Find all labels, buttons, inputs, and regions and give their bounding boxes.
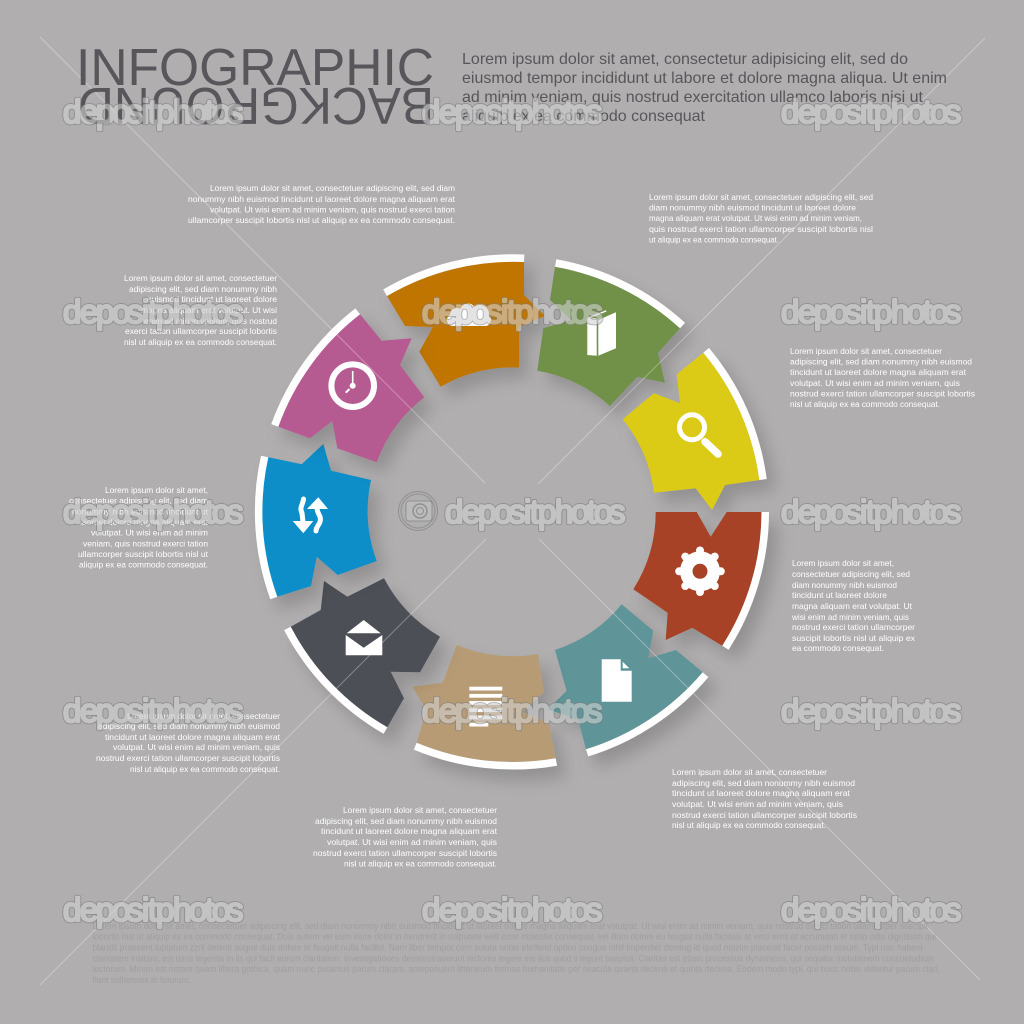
- watermarks: depositphotos: [422, 692, 602, 729]
- faint footer paragraph: blandit praesent luptatum zzril delenit augue duis dolore te feugait nulla facilisi. Nam liber tempor cum soluta nobis eleifend option congue nihil imperdiet doming id quod mazim placerat facer possim assum. Typi non habent: [92, 942, 923, 952]
- segment: teal document: [548, 604, 708, 756]
- caption: bottom right: nostrud exerci tation ullamcorper suscipit lobortis: [672, 810, 858, 820]
- watermarks: depositphotos: [422, 891, 602, 928]
- watermarks: depositphotos: [422, 93, 602, 130]
- watermarks: depositphotos: [63, 293, 244, 330]
- icon: clock: [331, 364, 374, 407]
- caption: bottom centre: nisl ut aliquip ex ea commodo consequat.: [344, 858, 497, 868]
- watermarks: depositphotos: [445, 493, 626, 530]
- caption: top right: magna aliquam erat volutpat. Ut wisi enim ad minim veniam,: [649, 213, 862, 223]
- caption: right upper: nisl ut aliquip ex ea commodo consequat.: [790, 399, 940, 409]
- caption: left: [69, 485, 209, 570]
- watermarks: depositphotos: [63, 93, 244, 130]
- caption: upper left: enim ad minim veniam, quis nostrud: [144, 316, 277, 326]
- caption: top left: ullamcorper suscipit lobortis nisl ut aliquip ex ea commodo consequat.: [188, 215, 455, 225]
- caption: bottom centre: nostrud exerci tation ullamcorper suscipit lobortis: [313, 848, 498, 858]
- segment: tan list: [412, 645, 557, 770]
- caption: right lower: wisi enim ad minim veniam, quis: [791, 612, 910, 622]
- caption: right lower: nostrud exerci tation ullamcorper: [792, 622, 915, 632]
- watermarks: depositphotos: [63, 493, 244, 530]
- faint footer paragraph: lobortis nisl ut aliquip ex ea commodo consequat. Duis autem vel eum iriure dolor in hendrerit in vulputate velit esse molestie consequat, vel illum dolore eu feugiat nulla facilisis at vero eros et accumsan et iusto odio dignissim qui: [92, 932, 936, 942]
- caption: bottom right: tincidunt ut laoreet dolore magna aliquam erat: [672, 788, 851, 798]
- segment: orange cloud: [383, 254, 545, 387]
- segment: red gear: [633, 512, 769, 650]
- icon: magnifier: [680, 415, 718, 454]
- intro paragraph: eiusmod tempor incididunt ut labore et dolore magna aliqua. Ut enim: [462, 70, 947, 87]
- watermarks: depositphotos: [781, 493, 962, 530]
- caption: right lower: suscipit lobortis nisl ut aliquip ex: [792, 633, 916, 643]
- intro paragraph: ad minim veniam, quis nostrud exercitation ullamco laboris nisi ut: [462, 89, 924, 106]
- caption: upper left: exerci tation ullamcorper suscipit lobortis: [125, 326, 278, 336]
- caption: right lower: diam nonummy nibh euismod: [792, 580, 897, 590]
- watermark camera icon: [398, 492, 438, 530]
- intro paragraph: Lorem ipsum dolor sit amet, consectetur adipisicing elit, sed do: [462, 51, 908, 68]
- watermarks: depositphotos: [63, 293, 244, 330]
- caption: right lower: tincidunt ut laoreet dolore: [792, 590, 887, 600]
- icon: exchange arrows: [293, 497, 328, 533]
- caption: bottom centre: volutpat. Ut wisi enim ad minim veniam, quis: [327, 837, 498, 847]
- caption: left: laoreet dolore magna aliquam erat: [80, 517, 209, 527]
- caption: upper left: Lorem ipsum dolor sit amet, consectetuer: [124, 273, 277, 283]
- segment: yellow magnifier: [623, 348, 767, 510]
- watermarks: depositphotos: [422, 293, 602, 330]
- caption: upper left: euismod tincidunt ut laoreet dolore: [147, 294, 277, 304]
- segment: pink clock: [271, 308, 424, 462]
- caption: bottom right: volutpat. Ut wisi enim ad minim veniam, quis: [672, 799, 844, 809]
- watermarks: depositphotos: [422, 692, 602, 729]
- caption: left: aliquip ex ea commodo consequat.: [79, 560, 208, 570]
- caption: top right: [649, 192, 873, 244]
- icon: gear: [675, 546, 725, 596]
- caption: bottom left: volutpat. Ut wisi enim ad minim veniam, quis: [113, 742, 281, 752]
- watermarks: depositphotos: [781, 93, 962, 130]
- caption: top left: nonummy nibh euismod tincidunt ut laoreet dolore magna aliquam erat: [188, 194, 456, 204]
- caption: right lower: Lorem ipsum dolor sit amet,: [792, 558, 894, 568]
- caption: upper left: [124, 273, 278, 347]
- caption: bottom right: [672, 767, 858, 830]
- caption: right lower: consectetuer adipiscing elit, sed: [792, 569, 910, 579]
- watermarks: [63, 93, 962, 928]
- caption: right upper: [790, 346, 976, 409]
- caption: bottom left: Lorem ipsum dolor sit amet, consectetuer: [127, 711, 280, 721]
- caption: right lower: ea commodo consequat.: [792, 643, 884, 653]
- caption: top right: diam nonummy nibh euismod tincidunt ut laoreet dolore: [649, 202, 856, 212]
- watermarks: depositphotos: [63, 493, 244, 530]
- faint footer paragraph: claritatem insitam; est usus legentis in iis qui facit eorum claritatem. Investigationes demonstraverunt lectores legere me lius quod ii legunt saepius. Claritas est etiam processus dynamicus, qui sequitur mutationem consuetudium: [92, 953, 934, 963]
- caption: bottom right: nisl ut aliquip ex ea commodo consequat.: [672, 820, 826, 830]
- watermarks: depositphotos: [63, 692, 244, 729]
- watermarks: depositphotos: [422, 93, 602, 130]
- watermarks: depositphotos: [781, 692, 962, 729]
- caption: left: nonummy nibh euismod tincidunt ut: [72, 506, 209, 516]
- caption: right upper: tincidunt ut laoreet dolore magna aliquam erat: [790, 367, 967, 377]
- watermarks: depositphotos: [63, 891, 244, 928]
- caption: right lower: [791, 558, 916, 653]
- watermarks: depositphotos: [63, 891, 244, 928]
- caption: bottom left: tincidunt ut laoreet dolore magna aliquam erat: [105, 732, 281, 742]
- faint footer paragraph: [92, 921, 940, 985]
- watermarks: depositphotos: [781, 493, 962, 530]
- caption: bottom left: [96, 711, 281, 774]
- watermarks: depositphotos: [781, 93, 962, 130]
- icon: book: [587, 310, 616, 356]
- segment: green book: [537, 259, 685, 406]
- caption: bottom centre: tincidunt ut laoreet dolore magna aliquam erat: [321, 826, 498, 836]
- caption: right upper: Lorem ipsum dolor sit amet, consectetuer: [790, 346, 942, 356]
- caption: top left: Lorem ipsum dolor sit amet, consectetuer adipiscing elit, sed diam: [210, 183, 455, 193]
- caption: right upper: volutpat. Ut wisi enim ad minim veniam, quis: [790, 378, 961, 388]
- caption: left: Lorem ipsum dolor sit amet,: [105, 485, 208, 495]
- faint footer paragraph: lectorum. Mirum est notare quam littera gothica, quam nunc putamus parum claram, anteposuerit litterarum formas humanitatis per seacula quarta decima et quinta decima. Eodem modo typi, qui nunc nobis videntur parum clari,: [92, 964, 940, 974]
- watermarks: depositphotos: [445, 493, 626, 530]
- caption: top left: volutpat. Ut wisi enim ad minim veniam, quis nostrud exerci tation: [210, 204, 455, 214]
- watermarks: depositphotos: [781, 293, 962, 330]
- circular diagram of nine segments: [255, 254, 769, 770]
- watermarks: depositphotos: [781, 293, 962, 330]
- caption: bottom centre: Lorem ipsum dolor sit amet, consectetuer: [343, 805, 497, 815]
- watermarks: depositphotos: [781, 891, 962, 928]
- caption: top right: ut aliquip ex ea commodo consequat.: [649, 234, 779, 244]
- caption: top right: Lorem ipsum dolor sit amet, consectetuer adipiscing elit, sed: [649, 192, 873, 202]
- caption: right lower: magna aliquam erat volutpat. Ut: [792, 601, 913, 611]
- intro paragraph: [462, 51, 947, 125]
- icon: cloud: [447, 304, 491, 326]
- caption: right upper: nostrud exerci tation ullamcorper suscipit lobortis: [790, 388, 976, 398]
- faint footer paragraph: fiant sollemnes in futurum.: [92, 975, 191, 985]
- caption: bottom right: adipiscing elit, sed diam nonummy nibh euismod: [672, 778, 855, 788]
- caption: right upper: adipiscing elit, sed diam nonummy nibh euismod: [790, 356, 972, 366]
- faint footer paragraph: Lorem ipsum dolor sit amet, consectetuer adipiscing elit, sed diam nonummy nibh euismod tincidunt ut laoreet dolore magna aliquam erat volutpat. Ut wisi enim ad minim veniam, quis nostrud exerci tation ullamcorper suscipit: [92, 921, 928, 931]
- caption: upper left: magna aliquam erat volutpat. Ut wisi: [141, 305, 277, 315]
- caption: left: ullamcorper suscipit lobortis nisl ut: [78, 549, 209, 559]
- intro paragraph: aliquip ex ea commodo consequat: [462, 108, 706, 125]
- segment: dark envelope: [284, 578, 440, 734]
- watermarks: depositphotos: [781, 891, 962, 928]
- caption: bottom centre: adipiscing elit, sed diam nonummy nibh euismod: [315, 816, 497, 826]
- title: upside-down BACKGROUND: BACKGROUND: [78, 77, 434, 135]
- segment: blue arrows: [255, 444, 377, 599]
- icon: envelope: [346, 620, 382, 655]
- caption: upper left: nisl ut aliquip ex ea commodo consequat.: [124, 337, 277, 347]
- caption: upper left: adipiscing elit, sed diam nonummy nibh: [129, 284, 277, 294]
- caption: bottom left: nisl ut aliquip ex ea commodo consequat.: [130, 764, 280, 774]
- watermarks: depositphotos: [63, 93, 244, 130]
- caption: left: veniam, quis nostrud exerci tation: [83, 538, 208, 548]
- icon: text list: [469, 687, 502, 726]
- watermarks: depositphotos: [422, 891, 602, 928]
- caption: top right: quis nostrud exerci tation ullamcorper suscipit lobortis nisl: [649, 224, 873, 234]
- watermarks: depositphotos: [63, 692, 244, 729]
- caption: bottom right: Lorem ipsum dolor sit amet, consectetuer: [672, 767, 827, 777]
- caption: bottom left: adipiscing elit, sed diam nonummy nibh euismod: [98, 721, 280, 731]
- caption: left: consectetuer adipiscing elit, sed diam: [69, 496, 208, 506]
- caption: bottom left: nostrud exerci tation ullamcorper suscipit lobortis: [96, 753, 281, 763]
- icon: document: [602, 659, 632, 702]
- caption: top left: [188, 183, 456, 225]
- watermarks: depositphotos: [422, 293, 602, 330]
- caption: bottom centre: [313, 805, 498, 868]
- caption: left: volutpat. Ut wisi enim ad minim: [91, 528, 208, 538]
- watermarks: depositphotos: [781, 692, 962, 729]
- title: INFOGRAPHIC: INFOGRAPHIC: [76, 38, 434, 96]
